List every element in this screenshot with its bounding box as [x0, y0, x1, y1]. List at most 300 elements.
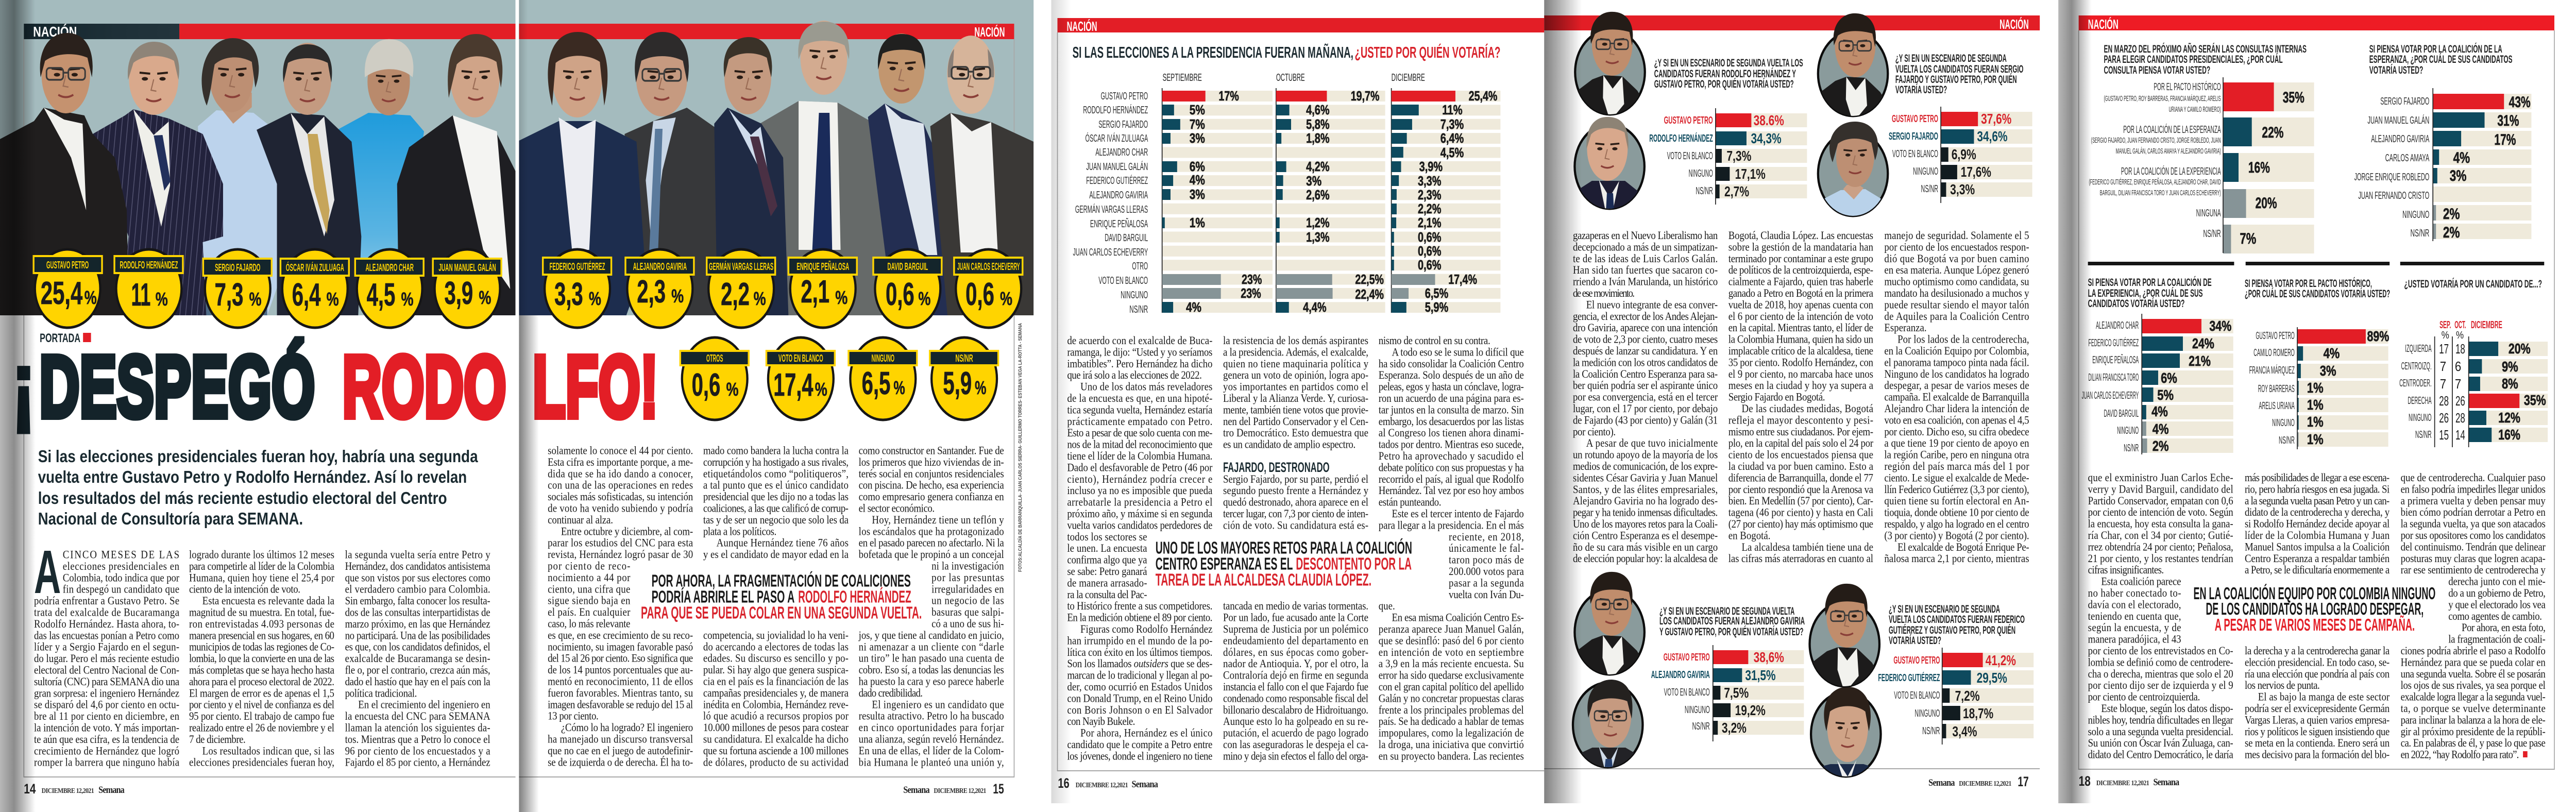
header bar: page 15: NACIÓN [974, 24, 1005, 40]
body text: page 17 column 2: implacable crítico de la alcaldesa, tiene [1728, 345, 1873, 357]
body text: page 16 column 3: frente a los principales problemas del [1379, 704, 1524, 716]
bar chart: Petro vs Gaviria: GUSTAVO PETRO [1664, 651, 1710, 663]
body text: page 14 column 3: En el crecimiento del ingeniero en [358, 699, 490, 711]
body text: page 15 column 3: bofetada que le propinó a un concejal [859, 549, 1004, 561]
bar chart: Petro vs Hernández [1649, 108, 1807, 205]
body text: page 17 column 2: las cifras más aterradoras en cuanto al [1728, 553, 1873, 565]
bar chart: pacto histórico: ROY BARRERAS [2258, 383, 2295, 394]
body text: page 16 column 3 [1379, 335, 1524, 763]
body text: page 16 column 1: ramanga, le dijo: “Usted y yo seríamos [1067, 346, 1212, 359]
body text: page 17 column 2: tagena (46 por ciento) y hasta en Cali [1728, 506, 1873, 519]
bar chart: voting intention by month: ALEJANDRO GAVIRIA [1089, 189, 1148, 200]
main title: RODO [342, 337, 506, 436]
question: consultas internas [2104, 42, 2307, 76]
body text: page 17 column 3: Ninguno de los candidatos ha logrado [1884, 368, 2029, 380]
body text: page 18 column 1: rrez obtendría 24 por ciento; Peñalosa, [2088, 541, 2233, 553]
body text: page 17 column 3: en esa materia. Aunque López generó [1884, 264, 2029, 277]
badge: Otros 0,6 %: % [726, 380, 738, 400]
body text: page 15 column 3: en cinco oportunidades para forjar [859, 722, 1004, 734]
footer: page 15: Semana [903, 784, 930, 795]
body text: page 16 column 2: yos importantes en partidos como el [1223, 381, 1368, 393]
body text: page 16 column 2 [1223, 335, 1369, 763]
bar chart: voting intention by month: GERMÁN VARGAS LLERAS [1075, 204, 1148, 215]
body text: page 14 column 1: gran sorpresa: el ingeniero Hernández [34, 687, 179, 700]
footer: page 18: Semana [2154, 776, 2179, 787]
bar chart: coalición de la experiencia: NS/NR [2124, 442, 2139, 453]
header bar: page 16 [1057, 18, 1544, 34]
body text: page 17 column 1: un rotundo apoyo de la mayoría de los [1573, 449, 1718, 461]
body text: page 14 column 1: romper la barrera que ninguno había [34, 756, 179, 769]
body text: page 15 column 3: por las presuntas [931, 572, 1004, 584]
body text: page 15 column 3: En una de ellas, el líder de la Colom- [859, 745, 1004, 757]
footer: page 14: Semana [98, 784, 125, 795]
body text: page 16 column 1 [1067, 335, 1213, 763]
header bar: page 15 [519, 24, 1014, 40]
photo credit: FOTOS:ALCALDÍA DE BARRANQUILLA- JUAN CARLOS SIERRA- GUILLERMO TORRES- ESTEBAN VEGA LA-ROTTA - SEMANA [1017, 323, 1023, 572]
body text: page 15 column 3: basuras que salpi- [931, 606, 1004, 618]
question: Gutiérrez vs Petro: VOTARÍA USTED? [1889, 634, 1941, 647]
body text: page 15 column 1: solamente lo conoce el 44 por ciento. [548, 445, 693, 457]
body text: page 17 column 3: llín Federico Gutiérrez (3,3 por ciento), [1884, 484, 2029, 496]
body text: page 15 column 2: edades. Su discurso es sencillo y po- [703, 652, 849, 665]
body text: page 16 column 3: Galán y no concretar propuestas claras [1379, 692, 1524, 705]
bars and values: diciembre: 7,3% [1440, 117, 1464, 132]
badge: Voto en blanco 17,4 %: 17,4 [773, 367, 813, 403]
body text: page 14 column 2: ahora para el proceso electoral de 2022. [189, 676, 334, 688]
body text: page 16 column 2: billonario descalabro de Hidroituango. [1223, 704, 1368, 716]
body text: page 17 column 2: cialmente a Fajardo, quien tras haberle [1728, 276, 1873, 288]
body text: page 17 column 3: ciento. Le sigue el exalcalde de Mede- [1884, 472, 2029, 484]
body text: page 18 column 2: ría una elección que pondría al país con [2245, 668, 2389, 680]
body text: page 17 column 2: Bogotá, Claudia López. Las encuestas [1728, 230, 1873, 242]
body text: page 18 column 3: rar ese sentimiento de centroderecha y [2401, 564, 2546, 577]
body text: page 16 column 3: peranza aparece Juan Manuel Galán, [1379, 623, 1524, 635]
body text: page 16 column 1: der, como ocurrió en Estados Unidos [1067, 681, 1212, 693]
body text: page 16 column 3: para llegar a la presidencia. En el más [1379, 519, 1524, 532]
question: Hernández vs Petro: GUSTAVO PETRO, POR QUIÉN VOTARÍA USTED? [1654, 78, 1794, 90]
question: coalición de la experiencia: CANDIDATOS VOTARÍA USTED? [2088, 297, 2184, 310]
bar chart: coalición de la experiencia: 4% [2153, 420, 2169, 437]
body text: page 14 column 3 [345, 549, 490, 769]
body text: page 15 column 3: en el pasado parecen no afectarlo. Ni la [859, 537, 1004, 549]
badge: Óscar Iván Zuluaga 6,4 %: ÓSCAR IVÁN ZULUAGA [286, 262, 344, 273]
bar chart: coalición de la esperanza: 2% [2443, 205, 2460, 222]
body text: page 17 column 3: el panorama tampoco pinta nada fácil. [1884, 357, 2029, 369]
body text: page 16 column 2: quien no tiene maquinaria política y [1223, 358, 1369, 370]
chart title: page 16: SI LAS ELECCIONES A LA PRESIDENCIA FUERAN MAÑANA, [1073, 43, 1353, 62]
body text: page 16 column 2: nen del Partido Conservador y el Cen- [1223, 416, 1368, 428]
body text: page 16 column 2: tro Democrático. Esto demuestra que [1223, 427, 1368, 439]
bar chart: orientación política: 15 [2439, 428, 2449, 443]
body text: page 15 column 2: plata a los políticos. [703, 526, 776, 538]
body text: page 16 column 1: se sabe: Petro ganará [1067, 566, 1147, 578]
bars and values: octubre: 4,4% [1303, 300, 1327, 315]
question: consultas internas: EN MARZO DEL PRÓXIMO AÑO SERÁN LAS CONSULTAS INTERNAS [2104, 42, 2307, 55]
bar chart: coalición de la experiencia [2082, 314, 2233, 454]
badge: Federico Gutiérrez 3,3 %: FEDERICO GUTIÉRREZ [550, 261, 605, 272]
body text: page 16 column 1: imbatibles”. Pero Hernández ha dicho [1067, 358, 1212, 370]
body text: page 18 column 2: podría ser el exvicepresidente Germán [2245, 703, 2389, 715]
body text: page 16 column 1: que irá solo a las elecciones de 2022. [1067, 369, 1202, 382]
bar chart: orientación política: SEP. [2439, 319, 2451, 330]
body text: page 17 column 2: bien. En Medellín (57 por ciento), Car- [1728, 495, 1873, 508]
subheading: Fajardo, destronado: FAJARDO, DESTRONADO [1223, 460, 1330, 475]
bar chart: Petro vs Gutiérrez: NS/NR [1922, 725, 1940, 736]
bars and values: septiembre: 3% [1190, 187, 1205, 202]
bar chart: Petro vs Gaviria: NINGUNO [1685, 704, 1710, 715]
bar chart: coalición de la esperanza: SERGIO FAJARDO [2380, 95, 2429, 107]
bars and values: diciembre: 17,4% [1448, 272, 1477, 287]
bar chart: pacto histórico: 1% [2307, 396, 2324, 413]
bar chart: voting intention by month: SEPTIEMBRE [1163, 72, 1202, 83]
body text: page 14 column 2 [189, 549, 334, 769]
bar chart: orientación política: IZQUIERDA [2405, 343, 2432, 354]
body text: page 16 column 2: tercer lugar, con 7,3 por ciento de inten- [1223, 508, 1368, 520]
body text: page 16 column 3: únicamente le fal- [1449, 543, 1524, 555]
bars and values: diciembre: 0,6% [1418, 230, 1441, 245]
bar chart: pacto histórico: FRANCIA MÁRQUEZ [2249, 364, 2295, 376]
body text: page 15 column 1: continuar al alza. [548, 514, 613, 526]
section tag: Portada: PORTADA [40, 331, 80, 345]
body text: page 16 column 1: to Histórico frente a sus competidores. [1067, 600, 1212, 613]
body text: page 15 column 1: dida que se ha ido dando a conocer, [548, 468, 693, 480]
question: Gaviria vs Petro: Y GUSTAVO PETRO, POR QUIÉN VOTARÍA USTED? [1659, 625, 1804, 638]
body text: page 17 column 1: después de lanzar su candidatura. Y en [1573, 345, 1718, 357]
pull quote: page 18: EN LA COALICIÓN EQUIPO POR COLOMBIA NINGUNO [2194, 583, 2435, 603]
bar chart: Petro vs Fajardo: 3,3% [1950, 181, 1975, 197]
body text: page 18 column 2: se meta en la contienda. Enero será un [2245, 737, 2389, 750]
body text: page 18 column 2: la derecha y a la centroderecha ganar la [2245, 645, 2389, 657]
body text: page 16 column 3: con el gran capital político del apellido [1379, 681, 1524, 693]
body text: page 15 column 3: ni amenazar a un cliente con “darle [859, 641, 1004, 653]
body text: page 14 column 2: ciento de la intención de voto. [189, 583, 300, 596]
body text: page 14 column 3: la encuesta del CNC para SEMANA [345, 711, 490, 722]
body text: page 16 column 2: con las aseguradoras le despeja el ca- [1223, 739, 1368, 751]
bars and values: diciembre: 2,3% [1418, 188, 1441, 202]
body text: page 15 column 3: ni la investigación [931, 560, 1004, 572]
bar chart: voting intention by month: NS/NR [1129, 303, 1148, 315]
bars and values: diciembre: 5,9% [1425, 300, 1448, 315]
question: consultas internas: PARA ELEGIR CANDIDATOS PRESIDENCIALES, ¿POR CUÁL [2104, 53, 2283, 65]
body text: page 16 column 2: quedó destronado, ahora aparece en el [1223, 496, 1368, 509]
bars and values: septiembre: 1% [1190, 215, 1205, 230]
chart title: page 16: ¿USTED POR QUIÉN VOTARÍA? [1354, 43, 1500, 62]
body text: page 15 column 3: irregularidades en [931, 583, 1004, 596]
bar chart: coalición de la experiencia: DILIAN FRANCISCA TORO [2088, 371, 2139, 383]
body text: page 15 column 1: por ciento de reco- [548, 560, 631, 572]
bar chart: Petro vs Gutiérrez: 18,7% [1963, 705, 1993, 721]
body text: page 18 column 3: del continuismo. Tendrán que delinear [2401, 541, 2546, 553]
bar chart: coalición de la experiencia: 5% [2157, 386, 2174, 403]
body text: page 17 column 3: de Aquiles para la Coalición Centro [1884, 311, 2029, 323]
subheading: Si las elecciones presidenciales fueran hoy, habría una segunda [38, 447, 478, 466]
header bar: page 18 [2079, 15, 2554, 32]
body text: page 14 column 1: la intención de voto. Y más importan- [34, 722, 179, 734]
body text: page 18 column 1: teniendo en cuenta que, [2088, 611, 2181, 622]
badge: Rodolfo Hernández 11 %: 11 [131, 277, 150, 313]
body text: page 15 column 3: bia Humana le planteó una unión y, [859, 756, 1004, 769]
body text: page 16 column 2: la resistencia de los demás aspirantes [1223, 335, 1368, 347]
bar chart: Petro vs Gaviria [1651, 645, 1804, 741]
body text: page 14 column 3: Hernández, dos candidatos antisistema [345, 561, 490, 572]
body text: page 15 column 1: Entre octubre y diciembre, al com- [561, 526, 693, 538]
body text: page 14 column 1: elecciones presidenciales en [63, 561, 179, 572]
question: Hernández vs Petro [1654, 57, 1803, 90]
body text: page 17 column 1: rriendo a Iván Marulanda, un histórico [1573, 276, 1718, 288]
bar chart: voting intention by month: DAVID BARGUIL [1105, 232, 1148, 243]
bar chart: coalición de la esperanza: JORGE ENRIQUE ROBLEDO [2354, 171, 2429, 182]
body text: page 15 column 3: los escándalos que ha protagonizado [859, 526, 1004, 538]
badge: Óscar Iván Zuluaga 6,4 %: 6,4 [292, 277, 320, 313]
badge: Sergio Fajardo 7,3 %: SERGIO FAJARDO [215, 262, 260, 273]
body text: page 15 column 2: campañas presidenciales y, de manera [703, 687, 849, 699]
body text: page 17 column 3: la región Caribe, pero en ninguna otra [1884, 449, 2029, 461]
body text: page 15 column 2: a tal punto que es el único candidato [703, 479, 849, 492]
body text: page 15 column 2: etiquetándolos como “politiqueros”, [703, 468, 849, 480]
body text: page 16 column 2: nador de Antioquia. Y, por el otro, la [1223, 658, 1368, 670]
bar chart: pacto histórico: ARELIS URIANA [2259, 400, 2295, 411]
bar chart: coalición de la esperanza: 2% [2443, 224, 2460, 241]
pull quote: page 18 [2194, 583, 2435, 635]
bars and values: diciembre: 6,4% [1440, 131, 1464, 146]
bar chart: Petro vs Gutiérrez: FEDERICO GUTIÉRREZ [1878, 672, 1940, 683]
body text: page 14 column 2: para competirle al líder de la Colombia [189, 561, 334, 572]
body text: page 15 column 2: 10.000 millones de pesos para costear [703, 722, 849, 734]
body text: page 16 column 2: mino y deja sin efectos el fallo del orga- [1223, 750, 1368, 763]
badge: Ninguno 6,5 % [849, 337, 917, 420]
body text: page 18 column 1: según la encuesta, y de [2088, 622, 2181, 634]
pull quote: page 16 [1156, 537, 1412, 589]
body text: page 17 column 3: ñalosa marca 2,1 por ciento, mientras [1884, 553, 2029, 565]
question: coalición de la esperanza: SI PIENSA VOTAR POR LA COALICIÓN DE LA [2369, 42, 2502, 55]
body text: page 16 column 1: lítica con éxito en los últimos tiempos. [1067, 647, 1212, 658]
question: Gutiérrez vs Petro: GUTIÉRREZ Y GUSTAVO PETRO, POR QUIÉN [1889, 624, 2015, 636]
body text: page 15 column 2: cia en el país es la financiación de las [703, 675, 849, 688]
bar chart: orientación política: NINGUNO [2409, 412, 2432, 423]
body text: page 15 column 1: sigue siendo baja en [548, 595, 630, 607]
bar chart: Petro vs Hernández: VOTO EN BLANCO [1667, 150, 1713, 161]
body text: page 16 column 1: todos los sectores se [1067, 531, 1147, 543]
body text: page 14 column 1: bre al 11 por ciento en diciembre, en [34, 711, 179, 722]
body text: page 18 column 1: verry y David Barguil, candidato del [2088, 483, 2233, 496]
body text: page 14 column 2: manera presencial en sus hogares, en 60 [189, 630, 334, 642]
bars and values: octubre: 3% [1306, 174, 1321, 189]
bars and values: diciembre: 0,6% [1418, 244, 1441, 259]
body text: page 17 column 2: en la capital. Mientras tanto, el líder de [1728, 322, 1873, 334]
bar chart: coalición de la esperanza: 3% [2450, 167, 2466, 184]
pull quote: page 15: RODOLFO HERNÁNDEZ [798, 587, 911, 606]
badge: Juan Carlos Echeverry 0,6 %: JUAN CARLOS ECHEVERRY [957, 261, 1020, 272]
body text: page 18 column 2 [2245, 472, 2390, 761]
body text: page 18 column 2: Centro Esperanza a respaldar también [2245, 553, 2389, 565]
bar chart: Petro vs Gutiérrez: 41,2% [1986, 652, 2016, 668]
bar chart: consultas: POR EL PACTO HISTÓRICO [2154, 81, 2221, 92]
body text: page 14 column 1: do lugar. Pero el más reciente estudio [34, 653, 179, 665]
bar chart: consultas: 22% [2262, 124, 2284, 141]
bar chart: Petro vs Gaviria: 19,2% [1735, 702, 1766, 718]
body text: page 17 column 3: voto en esa coalición, con apenas el 4,5 [1884, 414, 2029, 427]
body text: page 18 column 3: posturas muy claras que logren acapa- [2401, 553, 2546, 565]
bars and values: octubre [1276, 89, 1384, 315]
bar chart: coalición de la experiencia: FEDERICO GUTIÉRREZ [2088, 337, 2139, 348]
body text: page 14 column 2: municipios de todas las regiones de Co- [189, 641, 334, 653]
bar chart: consultas: 35% [2283, 89, 2304, 106]
header bar: page 14 [24, 23, 516, 40]
badge: Alejandro Char 4,5 %: % [401, 290, 413, 310]
bar chart: consultas: 20% [2256, 194, 2277, 211]
body text: page 17 column 1: Uno de los mayores retos para la Coali- [1573, 518, 1718, 530]
body text: page 14 column 2: magnitud de su muestra. En total, fue- [189, 606, 334, 619]
candidate photos, page 15 [519, 21, 1033, 315]
bar chart: coalición de la esperanza: JUAN FERNANDO CRISTO [2358, 190, 2429, 201]
body text: page 16 column 3: vuelta con Iván Du- [1449, 589, 1524, 601]
footer: page 16: 16 [1058, 775, 1070, 791]
question: consultas internas: CONSULTA PIENSA VOTAR USTED? [2104, 64, 2210, 76]
question: Hernández vs Petro: CANDIDATOS FUERAN RODOLFO HERNÁNDEZ Y [1654, 67, 1796, 80]
footer: page 16: DICIEMBRE 12,2021 [1076, 781, 1128, 789]
pull quote: page 18: A PESAR DE VARIOS MESES DE CAMPAÑA. [2215, 615, 2415, 635]
bar chart: orientación política: 18 [2455, 342, 2465, 357]
body text: page 15 column 3: ha puesto la cara y eso parece haberle [859, 675, 1004, 688]
body text: page 17 column 2: terminado por contaminar a este grupo [1728, 253, 1873, 265]
body text: page 16 column 1: Son los llamados outsiders que se des- [1067, 658, 1213, 670]
body text: page 16 column 2: genera un voto de opinión, logra apo- [1223, 369, 1368, 382]
body text: page 16 column 1: con Donald Trump, en el Reino Unido [1067, 692, 1212, 705]
badge: Germán Vargas Lleras 2,2 %: GERMÁN VARGAS LLERAS [709, 261, 773, 272]
body text: page 16 column 2: Suprema de Justicia por un polémico [1223, 623, 1368, 635]
badge: Alejandro Gaviria 2,3 %: 2,3 [637, 274, 666, 310]
body text: page 14 column 2: Esta encuesta es relevante dada la [202, 595, 334, 607]
body text: page 14 column 2: lombia, lo que la convierte en una de las [189, 653, 334, 665]
body text: page 14 column 1: te aún que esa cifra, es la tendencia de [34, 734, 179, 746]
body text: page 16 column 1: Figuras como Rodolfo Hernández [1080, 623, 1212, 635]
body text: page 15 column 3: como constructor en Santander. Fue de [859, 445, 1004, 457]
body text: page 18 column 1: cifras insignificantes. [2088, 564, 2164, 577]
body text: page 18 column 3: ta, o porque se vuelve determinante [2401, 703, 2546, 715]
body text: page 18 column 1: que el exministro Juan Carlos Eche- [2088, 472, 2233, 484]
badge: Ninguno 6,5 %: 6,5 [862, 366, 890, 401]
body text: page 15 column 3: jos, y que tiene al candidato en juicio, [858, 630, 1004, 641]
pull quote: page 18: DE LOS CANDIDATOS HA LOGRADO DESPEGAR, [2206, 599, 2424, 619]
bar chart: Petro vs Fajardo: GUSTAVO PETRO [1892, 113, 1938, 124]
body text: page 17 column 3: Esperanza. [1884, 322, 1927, 334]
bars and values: diciembre: 3,9% [1419, 159, 1443, 174]
body text: page 14 column 2: más completas que se haya hecho hasta [189, 664, 334, 676]
body text: page 18 column 1: davía con el electorado, [2088, 599, 2181, 611]
body text: page 18 column 3: y que el electorado los vea [2448, 599, 2546, 611]
badge: Gustavo Petro 25,4 %: GUSTAVO PETRO [46, 259, 89, 270]
body text: page 16 column 1: de manera arrasado- [1067, 577, 1147, 589]
badge: Sergio Fajardo 7,3 % [203, 249, 272, 328]
badge: Alejandro Gaviria 2,3 %: ALEJANDRO GAVIRIA [633, 261, 687, 272]
footer: page 18 [2079, 773, 2179, 789]
body text: page 17 column 1: por ciento). [1573, 426, 1616, 438]
body text: page 14 column 2: ron entrevistadas 4.093 personas de [189, 618, 334, 630]
body text: page 18 column 1: 21 por ciento, y los restantes tendrían [2088, 553, 2233, 565]
bar chart: Petro vs Gaviria: NS/NR [1692, 720, 1710, 732]
bar chart: orientación política: 7 [2440, 377, 2446, 392]
page frame lines [2079, 30, 2554, 769]
bar chart: Petro vs Gutiérrez: 7,2% [1955, 687, 1980, 704]
body text: page 14 column 3: Sin embargo, falta conocer los resulta- [345, 595, 490, 607]
body text: page 17 column 3: quien tiene su fortín electoral en An- [1884, 495, 2029, 508]
bar chart: voting intention by month [1073, 72, 1500, 315]
body text: page 15 column 1: Esta cifra es importante porque, a me- [548, 456, 693, 468]
question: pacto histórico [2245, 277, 2390, 300]
bar chart: Petro vs Gutiérrez: VOTO EN BLANCO [1894, 689, 1940, 701]
body text: page 14 column 2: Humana, quien hoy tiene el 25,4 por [189, 572, 334, 584]
body text: page 14 column 3: tos. Mientras que a Petro lo conoce el [345, 734, 490, 746]
badge: Voto en blanco 17,4 %: % [815, 380, 827, 400]
body text: page 16 column 3: En esa misma Coalición Centro Es- [1392, 612, 1524, 624]
body text: page 17 column 1: de voto de 2,3 por ciento, cuatro meses [1573, 333, 1718, 346]
body text: page 14 column 1: electoral del Centro Nacional de Con- [34, 664, 179, 676]
body text: page 14 column 3: no participará. Una de las posibilidades [345, 630, 490, 642]
bar chart: voting intention by month: GUSTAVO PETRO [1100, 90, 1148, 102]
badge: Otros 0,6 % [680, 337, 749, 420]
question: Gutiérrez vs Petro: ¿Y SI EN UN ESCENARIO DE SEGUNDA [1889, 603, 2000, 615]
badge: Federico Gutiérrez 3,3 %: 3,3 [554, 277, 583, 312]
bar chart: coalición de la esperanza: JUAN MANUEL GALÁN [2367, 114, 2429, 126]
portrait: Gustavo Petro [1809, 584, 1880, 687]
body text: page 17 column 1: la medición con los otros candidatos de [1573, 357, 1718, 369]
bar chart: voting intention by month: SERGIO FAJARDO [1098, 119, 1148, 130]
body text: page 17 column 3: respaldo, y algo ha logrado en el centro [1884, 518, 2029, 530]
question: Gutiérrez vs Petro: VUELTA LOS CANDIDATOS FUERAN FEDERICO [1889, 614, 2025, 625]
body text: page 15 column 1: revista, Hernández logró pasar de 30 [548, 549, 693, 561]
bar chart: Petro vs Gaviria: 3,2% [1722, 719, 1747, 736]
body text: page 18 column 3: en falso podría impedirles llegar unidos [2401, 483, 2546, 496]
body text: page 18 column 2: a Petro, se le dificultaría enormemente a [2245, 564, 2389, 577]
body text: page 14 column 1: crecimiento de Hernández que logró [34, 745, 179, 757]
body text: page 15 column 2: su candidatura. El exalcalde ha dicho [703, 733, 849, 746]
body text: page 15 column 2 [703, 445, 849, 769]
bars and values: octubre: 2,6% [1306, 188, 1330, 202]
body text: page 16 column 1: Por ahora, Hernández es el único [1080, 727, 1212, 739]
question: pacto histórico: SI PIENSA VOTAR POR EL PACTO HISTÓRICO, [2245, 277, 2372, 290]
body text: page 16 column 2: instancia el fallo con el que Fajardo fue [1223, 681, 1368, 693]
question: Fajardo vs Petro: FAJARDO Y GUSTAVO PETRO, POR QUIÉN [1895, 73, 2017, 86]
body text: page 18 column 3: que de centroderecha. Cualquier paso [2401, 472, 2546, 484]
bar chart: voting intention by month: VOTO EN BLANCO [1098, 275, 1148, 286]
body text: page 18 column 1: Partido Conservador, empatan con 0,6 [2088, 495, 2233, 507]
bar chart: orientación política: OCT. [2454, 319, 2466, 330]
body text: page 16 column 1: prácticamente empatado con Petro. [1067, 416, 1212, 428]
footer: page 14 [24, 781, 125, 797]
body text: page 16 column 1: de acuerdo con el exalcalde de Buca- [1067, 335, 1213, 347]
question: pacto histórico: ¿POR CUÁL DE SUS CANDIDATOS VOTARÍA USTED? [2245, 287, 2390, 300]
body text: page 16 column 3: a 3,9 en la más reciente encuesta. Su [1379, 658, 1524, 670]
pull quote: page 16: UNO DE LOS MAYORES RETOS PARA LA COALICIÓN [1156, 537, 1412, 557]
bars and values: diciembre: 6,5% [1425, 286, 1448, 301]
photo: Juan Carlos Echeverry [930, 36, 1033, 315]
bar chart: coalición de la experiencia: 34% [2209, 317, 2231, 334]
pull quote: page 15: PARA QUE SE PUEDA COLAR EN UNA SEGUNDA VUELTA. [641, 603, 922, 622]
body text: page 16 column 1: le unen. La encuesta [1067, 543, 1147, 555]
bars and values: octubre: 4,2% [1306, 159, 1330, 174]
question: Fajardo vs Petro [1895, 53, 2023, 96]
bar chart: Petro vs Hernández: NS/NR [1696, 185, 1713, 196]
question: coalición de la experiencia: LA EXPERIENCIA, ¿POR CUÁL DE SUS [2088, 287, 2203, 299]
bar chart: coalición de la experiencia: 2% [2153, 437, 2169, 454]
bars and values: octubre: 4,6% [1306, 103, 1330, 117]
body text: page 18 column 2: a la segunda vuelta pasan Petro y un can- [2245, 495, 2389, 507]
badge: Enrique Peñalosa 2,1 %: % [835, 288, 848, 309]
bar chart: orientación política: 26 [2439, 411, 2449, 426]
bar chart: voting intention by month: JUAN MANUEL GALÁN [1086, 161, 1148, 172]
photo: Alejandro Char [338, 39, 424, 258]
body text: page 16 column 3: Hernández. Tal vez por eso hoy ambos [1379, 485, 1524, 497]
